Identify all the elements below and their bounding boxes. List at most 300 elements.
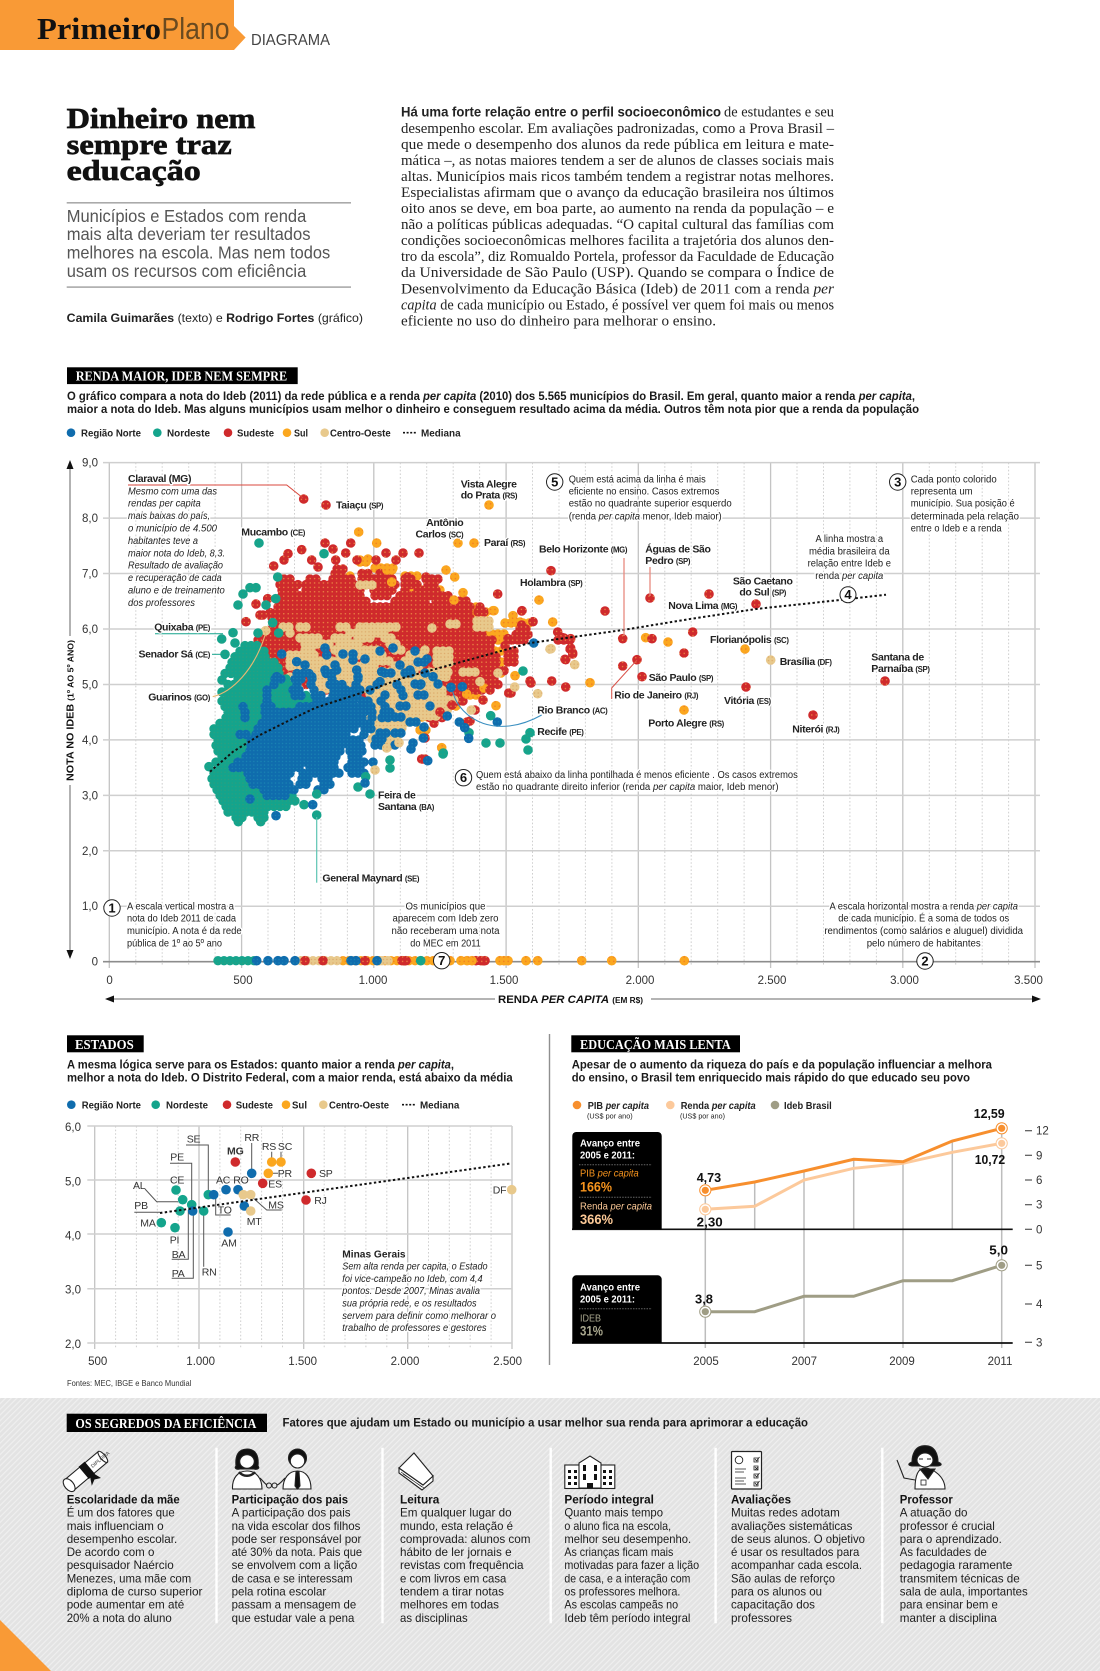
right axis: 3 [1036, 1337, 1042, 1349]
state labels: PA [172, 1268, 185, 1280]
municipality labels: Guarinos (GO) [148, 692, 211, 704]
intro text: scatter chart: O gráfico compara a nota do Ideb (2011) da rede pública e a renda per capita (2010) dos 5.565 municípios do Brasil. Em geral, quanto maior a renda per capita, [67, 391, 915, 403]
callout: Minas Gerais: servem para definir como melhorar o [342, 1311, 496, 1322]
column: professor: As faculdades de [900, 1545, 987, 1559]
x axis values [106, 975, 1043, 987]
callout: Minas Gerais: foi vice-campeão no Ideb, com 4,4 [342, 1274, 483, 1285]
panel: avanço PIB e renda: 2005 e 2011: [580, 1150, 635, 1162]
municipality labels: Niterói (RJ) [792, 723, 840, 735]
legend: scatter chart: Mediana [421, 428, 461, 440]
municipality labels: Águas de São [645, 543, 711, 556]
x axis values: 3.000 [890, 975, 919, 987]
note 4: média brasileira da [809, 546, 890, 557]
state labels: AC [216, 1174, 231, 1186]
municipality labels: Rio Branco (AC) [537, 704, 608, 716]
x axis values: 2.500 [758, 975, 786, 987]
title [67, 103, 256, 187]
right axis [1025, 1126, 1049, 1236]
municipality labels: Vitória (ES) [724, 695, 772, 707]
column: professor: Professor [900, 1492, 953, 1506]
isolated dots: Norte [250, 643, 534, 816]
intro text: educação: Apesar de o aumento da riqueza do país e da população influenciar a melhora [572, 1059, 993, 1071]
note 2: A escala horizontal mostra a renda per capita [829, 901, 1018, 912]
subtitle: Fatores que ajudam um Estado ou município a usar melhor sua renda para aprimorar a educação [282, 1418, 808, 1430]
note 5 [546, 474, 732, 522]
callout: Claraval: rendas per capita [128, 499, 201, 510]
column: professor: A atuação do [900, 1506, 968, 1520]
municipality labels: Porto Alegre (RS) [648, 718, 725, 730]
column: período integral: Período integral [564, 1492, 654, 1506]
values [697, 1106, 1005, 1230]
note 3 [890, 474, 1019, 534]
note 3: 3 [894, 474, 901, 490]
state labels: RJ [314, 1195, 327, 1207]
arrow: y axis with title [64, 460, 76, 959]
panel: avanço PIB e renda: PIB per capita [580, 1168, 639, 1180]
callout: Claraval: o município de 4.500 [128, 524, 217, 534]
column: participação dos pais: Participação dos pais [232, 1492, 348, 1506]
state labels: PB [134, 1200, 148, 1212]
note 5: eficiente no ensino. Casos extremos [569, 486, 719, 497]
body text: condições socioeconômicas melhores facilita a trajetória dos alunos den- [401, 233, 834, 249]
legend: estados [67, 1100, 460, 1112]
column: escolaridade da mãe: De acordo com o [67, 1545, 155, 1559]
callout: Claraval: aluno e de treinamento [128, 586, 225, 596]
arrow: x axis with title: RENDA PER CAPITA (EM R$) [498, 994, 643, 1006]
column: escolaridade da mãe: mais influenciam o [67, 1519, 164, 1533]
legend: educação: (US$ por ano) [680, 1111, 725, 1120]
y axis values: 0 [92, 957, 98, 969]
note 6 [455, 770, 798, 793]
y axis values: 9,0 [82, 458, 98, 470]
right axis: 0 [1036, 1224, 1042, 1236]
y axis values: 8,0 [82, 513, 98, 525]
column: participação dos pais: pela rotina escolar [232, 1584, 326, 1598]
column: período integral: o aluno fica na escola, [564, 1519, 671, 1533]
leader lines for labels [128, 485, 650, 883]
panel: avanço PIB e renda: Avanço entre [580, 1138, 640, 1150]
note 7: 7 [438, 953, 445, 968]
legend: scatter chart: Nordeste [167, 428, 210, 440]
intro text: scatter chart: maior a nota do Ideb. Mas alguns municípios usam melhor o dinheiro e conseguem resultado acima da média. Outros têm nota pior que a renda da população [67, 404, 919, 416]
note 1 [104, 900, 242, 950]
divider between charts [548, 1034, 550, 1365]
isolated dots: Sudeste [246, 499, 885, 759]
municipality labels: do Prata (RS) [461, 490, 518, 502]
column: leitura: as disciplinas [400, 1611, 468, 1625]
y axis values: 2,0 [82, 846, 98, 858]
legend: scatter chart: Sul [294, 428, 308, 440]
callout: Minas Gerais: Minas Gerais [342, 1248, 406, 1260]
deck text: Municípios e Estados com renda [67, 206, 307, 226]
column: avaliações: São aulas de reforço [731, 1571, 835, 1585]
legend: educação: PIB per capita [588, 1101, 649, 1112]
legend: scatter chart: Sudeste [237, 428, 274, 440]
state labels: RS [262, 1141, 276, 1153]
icon: pais [232, 1449, 311, 1489]
axis values [65, 1122, 522, 1368]
state labels: MT [247, 1216, 262, 1228]
legend: scatter chart [67, 428, 461, 440]
column: avaliações: para os alunos ou [731, 1584, 822, 1598]
values [695, 1242, 1008, 1306]
municipality labels: Rio de Janeiro (RJ) [614, 689, 699, 701]
state labels: RO [233, 1174, 249, 1186]
chart: estados scatter [65, 1122, 522, 1368]
note 2: de cada município. É a soma de todos os [838, 912, 1009, 925]
arrow: x axis with title [105, 994, 1041, 1006]
median trend line [210, 595, 886, 772]
municipality labels: do Sul (SP) [739, 587, 787, 599]
x axis values: 3.500 [1014, 975, 1043, 987]
legend: scatter chart: Centro-Oeste [330, 428, 391, 440]
legend: estados: Região Norte [82, 1101, 141, 1112]
chart: scatter Ideb x renda per capita [64, 458, 1043, 1006]
column: leitura: Leitura [400, 1492, 440, 1506]
icon: professora [897, 1446, 945, 1489]
intro text: estados [67, 1059, 513, 1084]
deck text: melhores na escola. Mas nem todos [67, 242, 330, 262]
column: avaliações [731, 1492, 865, 1625]
body text: Especialistas afirmam que o avanço da educação brasileira nos últimos [401, 185, 835, 201]
markers [700, 1260, 1007, 1317]
state labels: AM [221, 1238, 237, 1250]
axis values: 2.500 [493, 1356, 522, 1368]
values: 2,30 [697, 1215, 723, 1230]
column: professor: para ensinar bem e [900, 1598, 998, 1612]
series: PIB per capita [705, 1128, 1002, 1190]
state labels: ES [268, 1179, 282, 1191]
column: escolaridade da mãe: É um dos fatores que [67, 1505, 175, 1520]
body text: eficiente no uso do dinheiro para melhorar o ensino. [401, 313, 716, 329]
column: avaliações: é usar os resultados para [731, 1545, 860, 1559]
note 2: pelo número de habitantes [867, 938, 981, 950]
municipality labels: Nova Lima (MG) [668, 600, 738, 612]
note 3: município. Sua posição é [911, 499, 1015, 510]
column: período integral: de casa, e a interação com [564, 1571, 690, 1585]
column: avaliações: Avaliações [731, 1492, 791, 1506]
column: avaliações: capacitação dos [731, 1598, 815, 1612]
axis values: 2.000 [391, 1356, 419, 1368]
column: período integral: motivadas para fazer a lição [564, 1558, 699, 1572]
column: participação dos pais: pode ser responsável por [232, 1532, 361, 1546]
state labels: CE [170, 1175, 184, 1187]
state labels: PR [278, 1168, 293, 1180]
right axis: 5 [1036, 1260, 1042, 1272]
note 4: A linha mostra a [815, 534, 884, 545]
note 4 [808, 534, 891, 603]
isolated dots: Centro-Oeste [266, 631, 771, 770]
column: leitura: melhores em todas [400, 1598, 499, 1612]
isolated dots: Sul [359, 505, 745, 748]
intro text: educação: do ensino, o Brasil tem enriquecido mais rápido do que educado seu povo [572, 1072, 970, 1084]
state labels: SC [278, 1141, 293, 1153]
column: avaliações: avaliações sistemáticas [731, 1519, 852, 1533]
axis values: 3,0 [65, 1285, 81, 1297]
municipality labels: São Caetano [733, 575, 793, 587]
years: 2007 [792, 1356, 817, 1368]
column: leitura: mundo, esta relação é [400, 1519, 513, 1533]
column: escolaridade da mãe: desempenho escolar. [67, 1532, 177, 1546]
column: participação dos pais: de casa e se interessam [232, 1571, 353, 1585]
column: participação dos pais: até 30% da nota. Pais que [232, 1545, 362, 1559]
data cloud: Norte [233, 651, 444, 795]
header banner: Plano [162, 11, 230, 46]
axis values: 4,0 [65, 1230, 81, 1242]
panel: avanço PIB e renda: 366% [580, 1211, 614, 1227]
callout: Claraval: e recuperação de cada [128, 573, 222, 584]
municipality labels: Mucambo (CE) [241, 527, 306, 539]
legend: estados: Nordeste [166, 1101, 208, 1112]
right axis [1025, 1260, 1043, 1349]
callout: Minas Gerais: Sem alta renda per capita, o Estado [342, 1262, 488, 1273]
column: participação dos pais: se envolvem com a lição [232, 1558, 358, 1572]
y axis values: 4,0 [82, 735, 98, 747]
heading: os segredos da eficiência: OS SEGREDOS DA EFICIÊNCIA [75, 1416, 257, 1431]
note 2: 2 [921, 954, 929, 968]
markers [700, 1123, 1007, 1215]
note 1: nota do Ideb 2011 de cada [127, 914, 236, 925]
x axis values: 0 [106, 975, 113, 987]
municipality labels: Carlos (SC) [416, 528, 464, 540]
municipality labels: Recife (PE) [537, 726, 584, 738]
note 7 [392, 901, 500, 969]
right axis: 12 [1036, 1126, 1049, 1138]
column: participação dos pais: passam a mensagem de [232, 1598, 357, 1612]
municipality labels: Quixaba (PE) [154, 622, 211, 634]
icon: avaliação [732, 1452, 762, 1489]
note 3: entre o Ideb e a renda [911, 523, 1002, 534]
note 5: estão no quadrante superior esquerdo [569, 499, 732, 510]
panel: os segredos da eficiência [0, 1398, 1100, 1671]
note 1: município. A nota é da rede [127, 926, 242, 937]
y axis values: 1,0 [82, 901, 98, 913]
data cloud: Sul [350, 562, 530, 730]
column: avaliações: de seus alunos. O objetivo [731, 1532, 865, 1546]
note 2: rendimentos (como salários e aluguel) dividida [824, 926, 1023, 937]
title: Dinheiro nem [67, 103, 256, 135]
state labels: PE [170, 1151, 184, 1163]
municipality labels: Santana (BA) [378, 801, 435, 813]
state labels: DF [493, 1185, 506, 1197]
intro text: estados: melhor a nota do Ideb. O Distrito Federal, com a maior renda, está abaixo da média [67, 1072, 513, 1084]
note 5: (renda per capita menor, Ideb maior) [569, 511, 722, 522]
y axis values: 5,0 [82, 679, 98, 691]
deck text: usam os recursos com eficiência [67, 261, 307, 281]
axis values: 1.000 [186, 1356, 215, 1368]
state labels [133, 1132, 506, 1280]
municipality labels: Santana de [871, 651, 924, 663]
body text: altas. Municípios mais ricos também tendem a registrar notas melhores. [401, 169, 834, 185]
municipality labels: Paraí (RS) [484, 537, 526, 549]
municipality labels: São Paulo (SP) [649, 672, 714, 684]
column: escolaridade da mãe: Escolaridade da mãe [67, 1492, 180, 1506]
column: leitura [400, 1492, 530, 1625]
body text: Desenvolvimento da Educação Básica (Ideb) de 2011 com a renda per [401, 281, 835, 297]
callout: Claraval: habitantes teve a [128, 536, 198, 547]
panel: avanço Ideb: IDEB [580, 1313, 601, 1325]
y axis values: 7,0 [82, 568, 98, 580]
callout: Claraval: mais baixas do país, [128, 511, 210, 522]
values: 10,72 [975, 1152, 1005, 1167]
body text: que mede o desempenho dos alunos da rede pública em leitura e mate- [401, 137, 834, 153]
municipality labels: Senador Sá (CE) [139, 649, 211, 661]
axis values: 2,0 [65, 1339, 81, 1351]
column dividers [216, 1448, 882, 1623]
data cloud: Nordeste [212, 646, 340, 818]
axis values: 5,0 [65, 1176, 81, 1188]
note 1: 1 [108, 900, 116, 916]
column: avaliações: Muitas redes adotam [731, 1506, 840, 1520]
years [693, 1356, 1012, 1368]
intro text: scatter chart [67, 391, 919, 416]
legend: scatter chart: Região Norte [81, 428, 141, 440]
legend: estados: Mediana [420, 1101, 460, 1112]
column: participação dos pais: que estudar vale a pena [232, 1611, 355, 1625]
panel: avanço PIB e renda: Renda per capita [580, 1200, 652, 1212]
column: professor: pedagogia raramente [900, 1558, 1013, 1572]
median line [160, 1163, 512, 1213]
column: participação dos pais: A participação dos pais [232, 1506, 351, 1520]
body text: da Universidade de São Paulo (USP). Quando se compara o Índice de [401, 264, 834, 281]
x axis values: 2.000 [626, 975, 654, 987]
column: leitura: e com livros em casa [400, 1571, 507, 1585]
municipality labels: Holambra (SP) [520, 577, 583, 589]
panel: avanço PIB e renda [572, 1132, 662, 1230]
callout: Claraval: maior nota do Ideb, 8,3. [128, 548, 225, 559]
heading: educação mais lenta: EDUCAÇÃO MAIS LENTA [580, 1037, 731, 1052]
legend: estados: Sul [292, 1101, 307, 1112]
series: Ideb [705, 1265, 1002, 1312]
note 7: Os municípios que [406, 901, 486, 912]
header banner: DIAGRAMA [251, 32, 330, 49]
note 1: A escala vertical mostra a [127, 901, 234, 912]
column: leitura: revistas com frequência [400, 1558, 524, 1572]
note 4: relação entre Ideb e [808, 559, 891, 570]
column: avaliações: acompanhar cada escola. [731, 1558, 862, 1572]
source note: Fontes: MEC, IBGE e Banco Mundial [67, 1378, 191, 1388]
values: 4,73 [697, 1170, 721, 1185]
x axis values: 500 [233, 975, 253, 987]
column: período integral: os professores melhora. [564, 1584, 680, 1598]
column: período integral: Quanto mais tempo [564, 1506, 663, 1520]
column: avaliações: professores [731, 1611, 792, 1625]
body text [401, 105, 835, 329]
zero row: municipalities with Ideb zero [218, 956, 684, 965]
title: educação [67, 155, 201, 187]
note 1: pública de 1º ao 5º ano [127, 938, 222, 950]
state dots [156, 1157, 516, 1237]
callout: Minas Gerais: sua própria rede, e os resultados [342, 1299, 477, 1310]
column: professor: para o aprendizado. [900, 1532, 1002, 1546]
municipality labels: Florianópolis (SC) [710, 634, 789, 646]
column: leitura: tendem a tirar notas [400, 1584, 504, 1598]
column: escolaridade da mãe: pode aumentar em até [67, 1598, 185, 1612]
intro text: educação [572, 1059, 993, 1084]
chart: Ideb Brasil [572, 1242, 1043, 1368]
leader lines [134, 1143, 282, 1278]
header banner [0, 0, 330, 50]
column: professor: manter a disciplina [900, 1611, 997, 1625]
legend: educação [573, 1101, 832, 1120]
right axis: 4 [1036, 1299, 1043, 1311]
municipality labels: Taiaçu (SP) [336, 500, 384, 512]
column: escolaridade da mãe: pesquisador Naércio [67, 1558, 174, 1572]
callout: Claraval: Claraval (MG) [128, 473, 191, 485]
icon: livro [399, 1453, 433, 1490]
icon: diploma: DIPLOMA [90, 1450, 112, 1470]
column: período integral: Ideb têm período integral [564, 1611, 690, 1625]
note 3: Cada ponto colorido [911, 474, 997, 485]
legend: educação: Renda per capita [681, 1101, 756, 1112]
state labels: MS [268, 1199, 284, 1211]
legend: estados: Centro-Oeste [329, 1101, 389, 1112]
right axis: 9 [1036, 1150, 1042, 1162]
y axis values: 6,0 [82, 624, 98, 636]
data cloud: Centro-Oeste [275, 585, 490, 745]
y axis values: 3,0 [82, 790, 98, 802]
column: escolaridade da mãe: diploma de curso superior [67, 1584, 202, 1598]
title: sempre traz [67, 129, 232, 161]
note 3: determinada pela relação [911, 511, 1019, 522]
deck text: mais alta deveriam ter resultados [67, 224, 311, 244]
state labels: MA [140, 1218, 156, 1230]
axis values: 500 [88, 1356, 107, 1368]
years: 2005 [693, 1356, 719, 1368]
municipality labels: Parnaíba (SP) [871, 663, 930, 675]
series: renda per capita [705, 1143, 1002, 1209]
years: 2011 [988, 1356, 1012, 1368]
note 5: Quem está acima da linha é mais [569, 474, 706, 485]
deck text [67, 202, 351, 288]
note 7: do MEC em 2011 [410, 938, 481, 950]
note 4: renda per capita [815, 571, 884, 582]
panel: avanço PIB e renda: 166% [580, 1178, 612, 1194]
municipality labels: Pedro (SP) [645, 555, 691, 567]
callout: Minas Gerais: trabalho de professores e gestores [342, 1323, 487, 1334]
body text: de estudantes e seu [724, 105, 834, 121]
note 2 [824, 901, 1023, 969]
column: leitura: comprovada: alunos com [400, 1532, 530, 1546]
column: participação dos pais [232, 1492, 362, 1625]
note 6: 6 [460, 770, 467, 785]
isolated dots: Nordeste [209, 543, 530, 822]
municipality labels: Feira de [378, 790, 416, 802]
body text: desempenho escolar. Em avaliações padronizadas, como a Prova Brasil – [401, 121, 835, 137]
municipality labels: Brasília (DF) [780, 656, 832, 668]
right axis: 3 [1036, 1200, 1042, 1212]
state labels: AL [133, 1180, 146, 1192]
chart: PIB and renda per capita [572, 1106, 1049, 1348]
state labels: SP [319, 1168, 333, 1180]
column: participação dos pais: na vida escolar dos filhos [232, 1519, 360, 1533]
column: período integral: As crianças ficam mais [564, 1545, 673, 1559]
state labels: RR [244, 1132, 260, 1144]
column: escolaridade da mãe [67, 1492, 202, 1625]
legend: estados: Sudeste [236, 1101, 273, 1112]
column: período integral [564, 1492, 699, 1625]
callout: Claraval: Resultado de avaliação [128, 561, 223, 572]
icon: escola [565, 1456, 615, 1488]
data cloud: Sudeste [258, 569, 572, 723]
municipality labels: Vista Alegre [461, 478, 517, 490]
note 6: Quem está abaixo da linha pontilhada é menos eficiente . Os casos extremos [476, 770, 798, 781]
municipality labels: General Maynard (SE) [322, 873, 420, 885]
state labels: RN [202, 1266, 216, 1278]
state labels: BA [172, 1249, 186, 1261]
header banner: Primeiro [37, 11, 161, 46]
municipality labels [139, 478, 930, 885]
